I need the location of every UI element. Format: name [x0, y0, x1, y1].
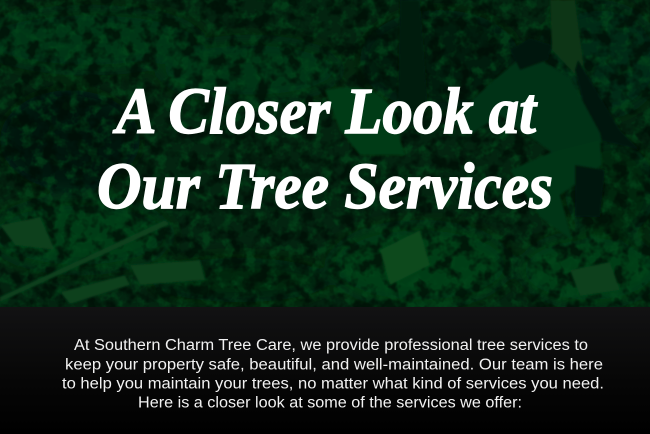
intro paragraph: to help you maintain your trees, no matter what kind of services you need.	[62, 376, 604, 392]
title	[97, 75, 553, 223]
intro paragraph: keep your property safe, beautiful, and well-maintained. Our team is here	[65, 356, 603, 374]
background photo: worker in the forest, green tint	[0, 0, 650, 308]
title: Our Tree Services	[97, 150, 553, 223]
intro paragraph: At Southern Charm Tree Care, we provide professional tree services to	[74, 337, 588, 354]
bottom dark panel	[0, 307, 650, 434]
intro paragraph: Here is a closer look at some of the services we offer:	[138, 394, 522, 412]
title: A Closer Look at	[112, 75, 538, 148]
intro paragraph	[62, 337, 604, 412]
